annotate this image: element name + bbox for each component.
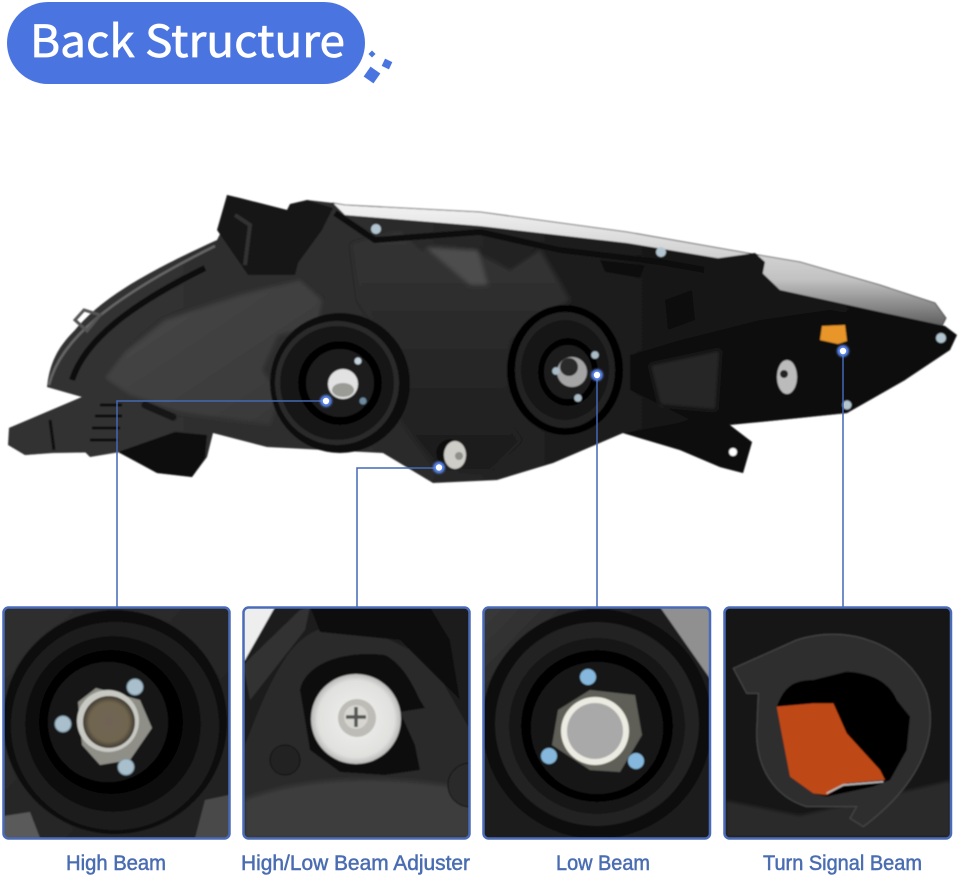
- label: Turn Signal Beam: Turn Signal Beam: [763, 852, 922, 875]
- label: High/Low Beam Adjuster: High/Low Beam Adjuster: [241, 852, 470, 875]
- title badge: Back Structure: Back Structure: [30, 6, 345, 70]
- centre body panel: [353, 232, 570, 470]
- decorative diamonds icon: [364, 50, 392, 83]
- top flange ridge: [335, 213, 705, 270]
- high beam socket: [270, 313, 410, 453]
- label: Low Beam: Low Beam: [556, 852, 650, 875]
- headlight back housing photo: [8, 195, 957, 483]
- panel: high beam close-up: [3, 607, 230, 839]
- callout dots: [320, 345, 849, 474]
- top connector bracket: [217, 195, 333, 275]
- turn signal socket: [767, 316, 854, 402]
- lower right bracket: [623, 412, 752, 473]
- left flange rim: [49, 246, 215, 385]
- leader lines: [117, 351, 843, 607]
- title badge: Back Structure: [7, 2, 365, 84]
- panel: low beam close-up: [482, 607, 712, 839]
- beam adjuster bolt: [436, 439, 466, 469]
- left grey body facet: [105, 280, 322, 425]
- low beam socket: [507, 305, 623, 435]
- left tab with slats: [9, 393, 173, 455]
- lower left connector: [118, 432, 207, 477]
- label: High Beam: High Beam: [66, 852, 166, 875]
- panel: turn signal beam close-up: [724, 607, 952, 839]
- right connector bracket: [703, 253, 765, 298]
- lens rim behind housing: [333, 203, 946, 330]
- right rear body: [630, 310, 945, 425]
- mounting screws: [371, 224, 946, 410]
- clip on flange: [75, 310, 100, 331]
- panel: high/low beam adjuster close-up: [243, 607, 492, 839]
- main housing silhouette: [8, 195, 957, 483]
